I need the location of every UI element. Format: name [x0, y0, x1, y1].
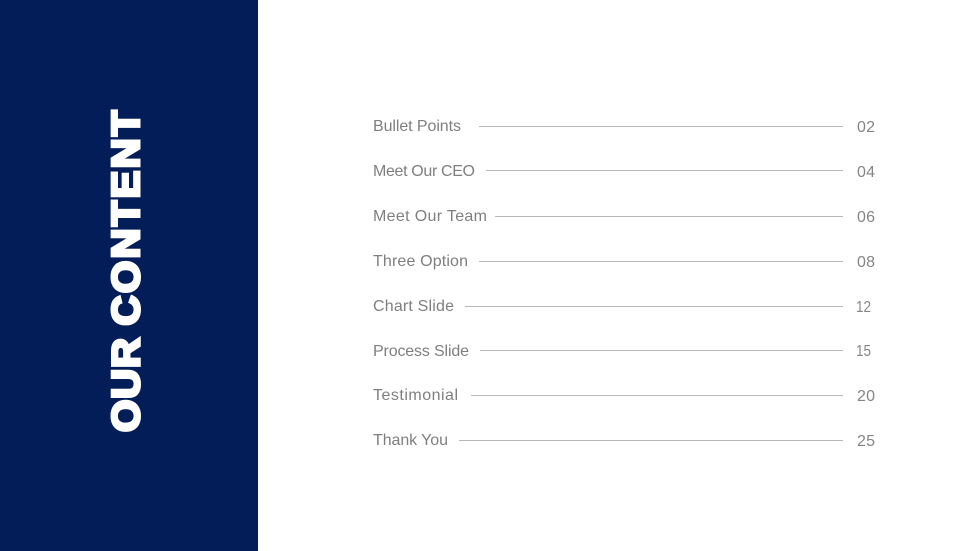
- leader line: Chart Slide: [465, 306, 843, 308]
- label: Meet Our Team: Meet Our Team: [373, 208, 487, 225]
- page number: 04: 04: [857, 164, 875, 181]
- panel: navy sidebar: [0, 0, 258, 551]
- leader line: Thank You: [459, 440, 843, 442]
- page number: 06: 06: [857, 209, 875, 226]
- leader line: Process Slide: [480, 350, 843, 352]
- leader line: Meet Our CEO: [486, 170, 843, 172]
- leader line: Meet Our Team: [495, 216, 843, 218]
- label: Three Option: Three Option: [373, 253, 468, 270]
- title: our content: [105, 110, 148, 432]
- label: Thank You: Thank You: [373, 432, 448, 449]
- leader line: Testimonial: [471, 394, 843, 396]
- page number: 12: 12: [856, 299, 871, 316]
- page number: 20: 20: [857, 388, 875, 405]
- label: Testimonial: Testimonial: [373, 387, 458, 404]
- title: our content: OUR: [105, 338, 148, 432]
- leader line: Three Option: [479, 260, 843, 262]
- label: Meet Our CEO: Meet Our CEO: [373, 163, 475, 180]
- page number: 02: 02: [857, 119, 875, 136]
- title: our content: CONTENT: [105, 110, 148, 326]
- leader line: Bullet Points: [479, 126, 843, 128]
- label: Bullet Points: Bullet Points: [373, 118, 461, 135]
- label: Chart Slide: Chart Slide: [373, 298, 454, 315]
- page number: 25: 25: [857, 433, 875, 450]
- label: Process Slide: Process Slide: [373, 343, 469, 360]
- page number: 08: 08: [857, 254, 875, 271]
- page number: 15: 15: [856, 343, 871, 360]
